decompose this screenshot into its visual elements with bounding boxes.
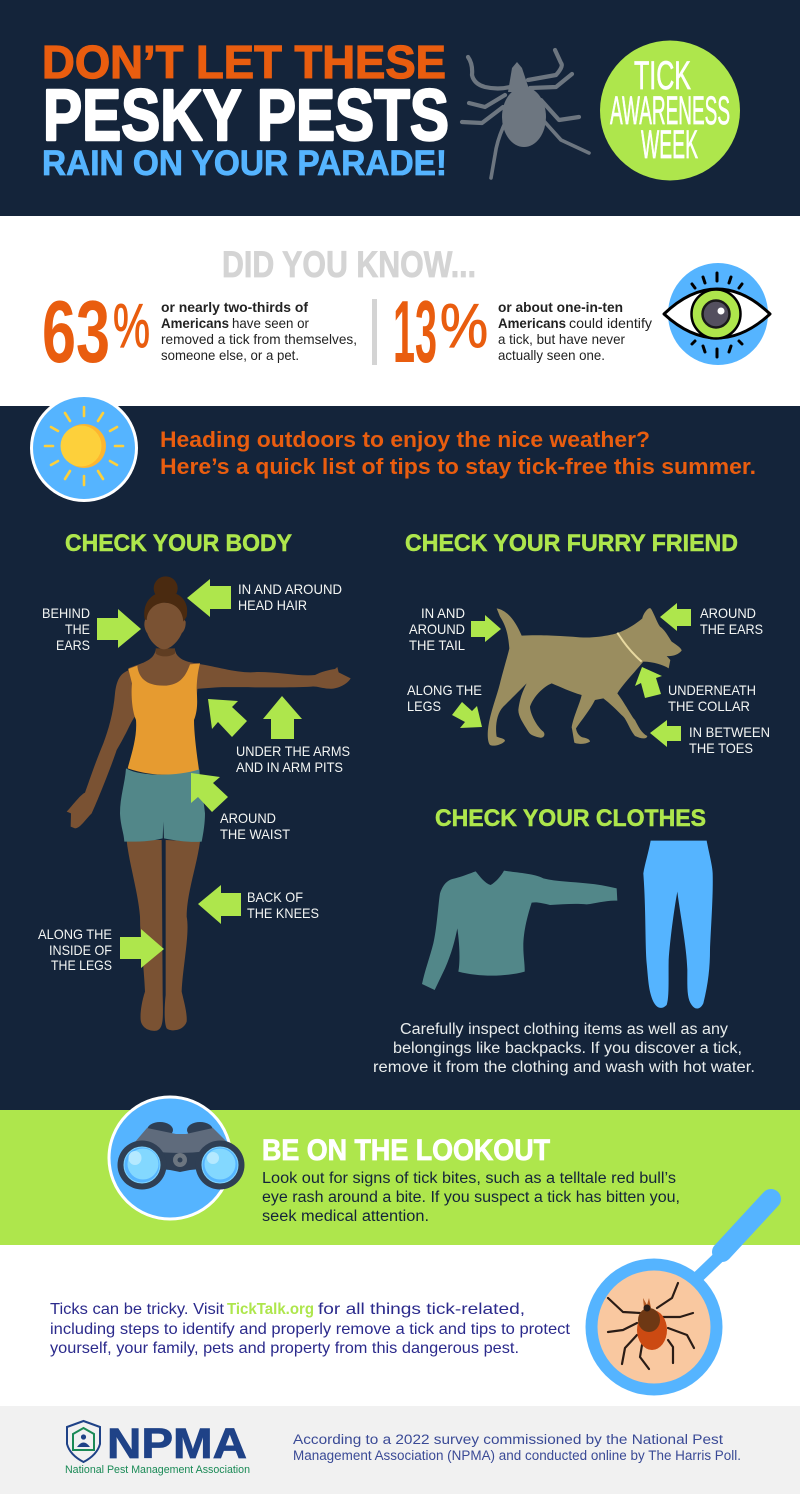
stat: 13 percent: could identify	[569, 315, 652, 331]
stat: 63 percent: someone else, or a pet.	[161, 347, 299, 363]
labels: body: UNDER THE ARMS	[236, 743, 350, 759]
stat: 63 percent: removed a tick from themselves,	[161, 331, 357, 347]
badge: tick awareness week: WEEK	[641, 123, 698, 167]
stat: 13 percent: or about one-in-ten	[498, 299, 623, 315]
stat: 63 percent	[42, 282, 357, 381]
arrows: dog	[452, 603, 691, 747]
heading: check your furry friend: CHECK YOUR FURRY FRIEND	[405, 530, 738, 557]
text: clothes instructions: remove it from the clothing and wash with hot water.	[373, 1059, 755, 1076]
heading: BE ON THE LOOKOUT	[262, 1134, 550, 1167]
title line 3: RAIN ON YOUR PARADE!	[42, 144, 447, 183]
stat: 13 percent	[393, 282, 652, 381]
text block	[262, 1170, 680, 1225]
logo: NPMA: National Pest Management Association	[65, 1464, 250, 1476]
stat: 13 percent: a tick, but have never	[498, 331, 625, 347]
illustration: dog	[488, 608, 682, 746]
stat: 13 percent: actually seen one.	[498, 347, 605, 363]
icon: eye	[664, 263, 770, 365]
text: source note	[293, 1432, 741, 1463]
stat: 63 percent: Americans	[161, 315, 229, 331]
labels: body: BEHIND	[42, 605, 90, 621]
stat: 63 percent: or nearly two-thirds of	[161, 299, 308, 315]
text block: eye rash around a bite. If you suspect a tick has bitten you,	[262, 1189, 680, 1206]
illustration: woman	[67, 576, 351, 1031]
icon: sun	[30, 394, 138, 502]
labels: body: BACK OF	[247, 889, 303, 905]
labels: body: THE	[65, 621, 90, 637]
labels: dog: THE TAIL	[409, 637, 465, 653]
labels: dog: UNDERNEATH	[668, 682, 756, 698]
stat: 63 percent: have seen or	[232, 315, 309, 331]
text block: seek medical attention.	[262, 1208, 429, 1225]
illustration: pants	[643, 841, 713, 1009]
labels: body: THE LEGS	[51, 957, 112, 973]
labels: dog: THE COLLAR	[668, 698, 750, 714]
text block: ticktalk: including steps to identify and properly remove a tick and tips to protect	[50, 1321, 571, 1338]
labels: dog: THE TOES	[689, 740, 753, 756]
logo: NPMA: NPMA	[107, 1420, 247, 1468]
labels: body: THE WAIST	[220, 826, 290, 842]
intro text	[160, 427, 756, 479]
labels: body: IN AND AROUND	[238, 581, 342, 597]
stat: 13 percent: %	[440, 292, 488, 361]
heading: check your clothes: CHECK YOUR CLOTHES	[435, 805, 706, 832]
arrows: body	[97, 579, 302, 968]
panel: be on the lookout	[0, 1097, 800, 1245]
text: source note: According to a 2022 survey commissioned by the National Pest	[293, 1432, 723, 1447]
panel: header	[0, 0, 800, 216]
labels: body: ALONG THE	[38, 926, 112, 942]
labels: body: HEAD HAIR	[238, 597, 307, 613]
labels: dog: IN AND	[421, 605, 465, 621]
labels: dog: LEGS	[407, 698, 441, 714]
labels: body: INSIDE OF	[49, 942, 112, 958]
stat: 63 percent: %	[113, 292, 150, 361]
text: clothes instructions: Carefully inspect clothing items as well as any	[400, 1021, 728, 1038]
stat: 13 percent: Americans	[498, 315, 566, 331]
badge: tick awareness week	[600, 40, 740, 180]
labels: body	[38, 581, 350, 973]
labels: body: AND IN ARM PITS	[236, 759, 343, 775]
text block: ticktalk	[50, 1301, 571, 1357]
title line 2: PESKY PESTS	[43, 76, 449, 156]
labels: dog: ALONG THE	[407, 682, 482, 698]
text block: ticktalk: TickTalk.org	[227, 1301, 314, 1318]
stat: 13 percent: 13	[393, 282, 437, 381]
icon: binoculars	[109, 1097, 244, 1219]
panel: tips dark section	[0, 394, 800, 1110]
intro text: Heading outdoors to enjoy the nice weather?	[160, 427, 650, 452]
labels: body: EARS	[56, 637, 90, 653]
illustration: long-sleeve shirt	[422, 871, 617, 990]
labels: body: AROUND	[220, 810, 276, 826]
panel: footer	[0, 1406, 800, 1494]
text: source note: Management Association (NPMA) and conducted online by The Harris Poll.	[293, 1448, 741, 1463]
badge: tick awareness week: TICK	[634, 54, 691, 98]
text: clothes instructions: belongings like backpacks. If you discover a tick,	[393, 1040, 742, 1057]
logo: NPMA	[65, 1420, 250, 1476]
labels: body: THE KNEES	[247, 905, 319, 921]
intro text: Here’s a quick list of tips to stay tick-free this summer.	[160, 454, 756, 479]
text: clothes instructions	[373, 1021, 755, 1076]
text block: ticktalk: yourself, your family, pets and property from this dangerous pest.	[50, 1340, 519, 1357]
title line 1: DON’T LET THESE	[42, 36, 446, 88]
heading: check your body: CHECK YOUR BODY	[65, 530, 292, 557]
heading: DID YOU KNOW...	[222, 244, 476, 285]
text block: ticktalk: Ticks can be tricky. Visit	[50, 1301, 225, 1318]
panel: did you know	[42, 244, 770, 381]
icon: tick silhouette	[462, 50, 589, 178]
stat: 63 percent: 63	[42, 282, 110, 381]
text block: ticktalk: for all things tick-related,	[318, 1301, 525, 1318]
labels: dog: AROUND	[409, 621, 465, 637]
text block: Look out for signs of tick bites, such as a telltale red bull’s	[262, 1170, 676, 1187]
labels: dog: IN BETWEEN	[689, 724, 770, 740]
labels: dog: THE EARS	[700, 621, 763, 637]
icon: magnifying glass with tick	[586, 1199, 771, 1396]
labels: dog: AROUND	[700, 605, 756, 621]
labels: dog	[407, 605, 770, 756]
